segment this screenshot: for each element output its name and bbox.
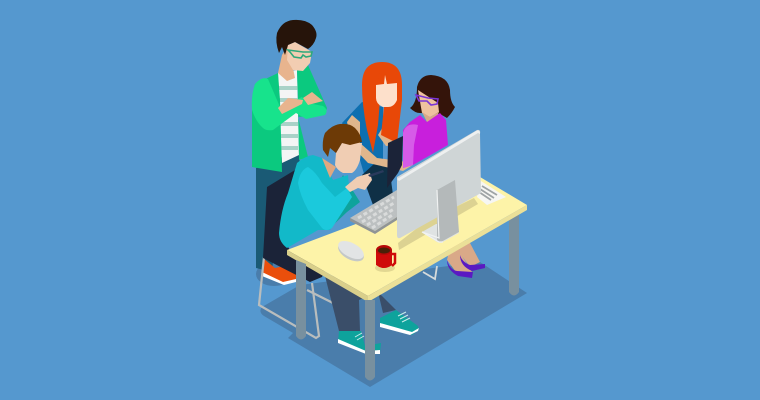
red coffee mug <box>375 245 395 272</box>
desk leg: left <box>296 260 306 340</box>
chair behind woman <box>387 136 403 188</box>
desk leg: front <box>365 300 375 380</box>
monitor shadow on desk <box>398 198 478 250</box>
computer monitor <box>397 130 481 243</box>
person: woman with purple glasses <box>387 75 485 279</box>
computer mouse <box>335 237 367 265</box>
paper document <box>477 181 506 205</box>
person: seated man trousers and shoes <box>325 275 419 354</box>
person: standing man with glasses <box>252 20 327 286</box>
legs and flats <box>447 238 480 272</box>
person: seated man in hoodie <box>279 124 384 248</box>
desk leg: rear right <box>509 210 519 296</box>
chair frame <box>259 257 358 338</box>
keyboard <box>350 190 397 234</box>
person: red-haired woman <box>342 62 416 205</box>
floor shadow <box>260 262 527 387</box>
office chair <box>263 170 325 282</box>
desk <box>287 177 527 380</box>
